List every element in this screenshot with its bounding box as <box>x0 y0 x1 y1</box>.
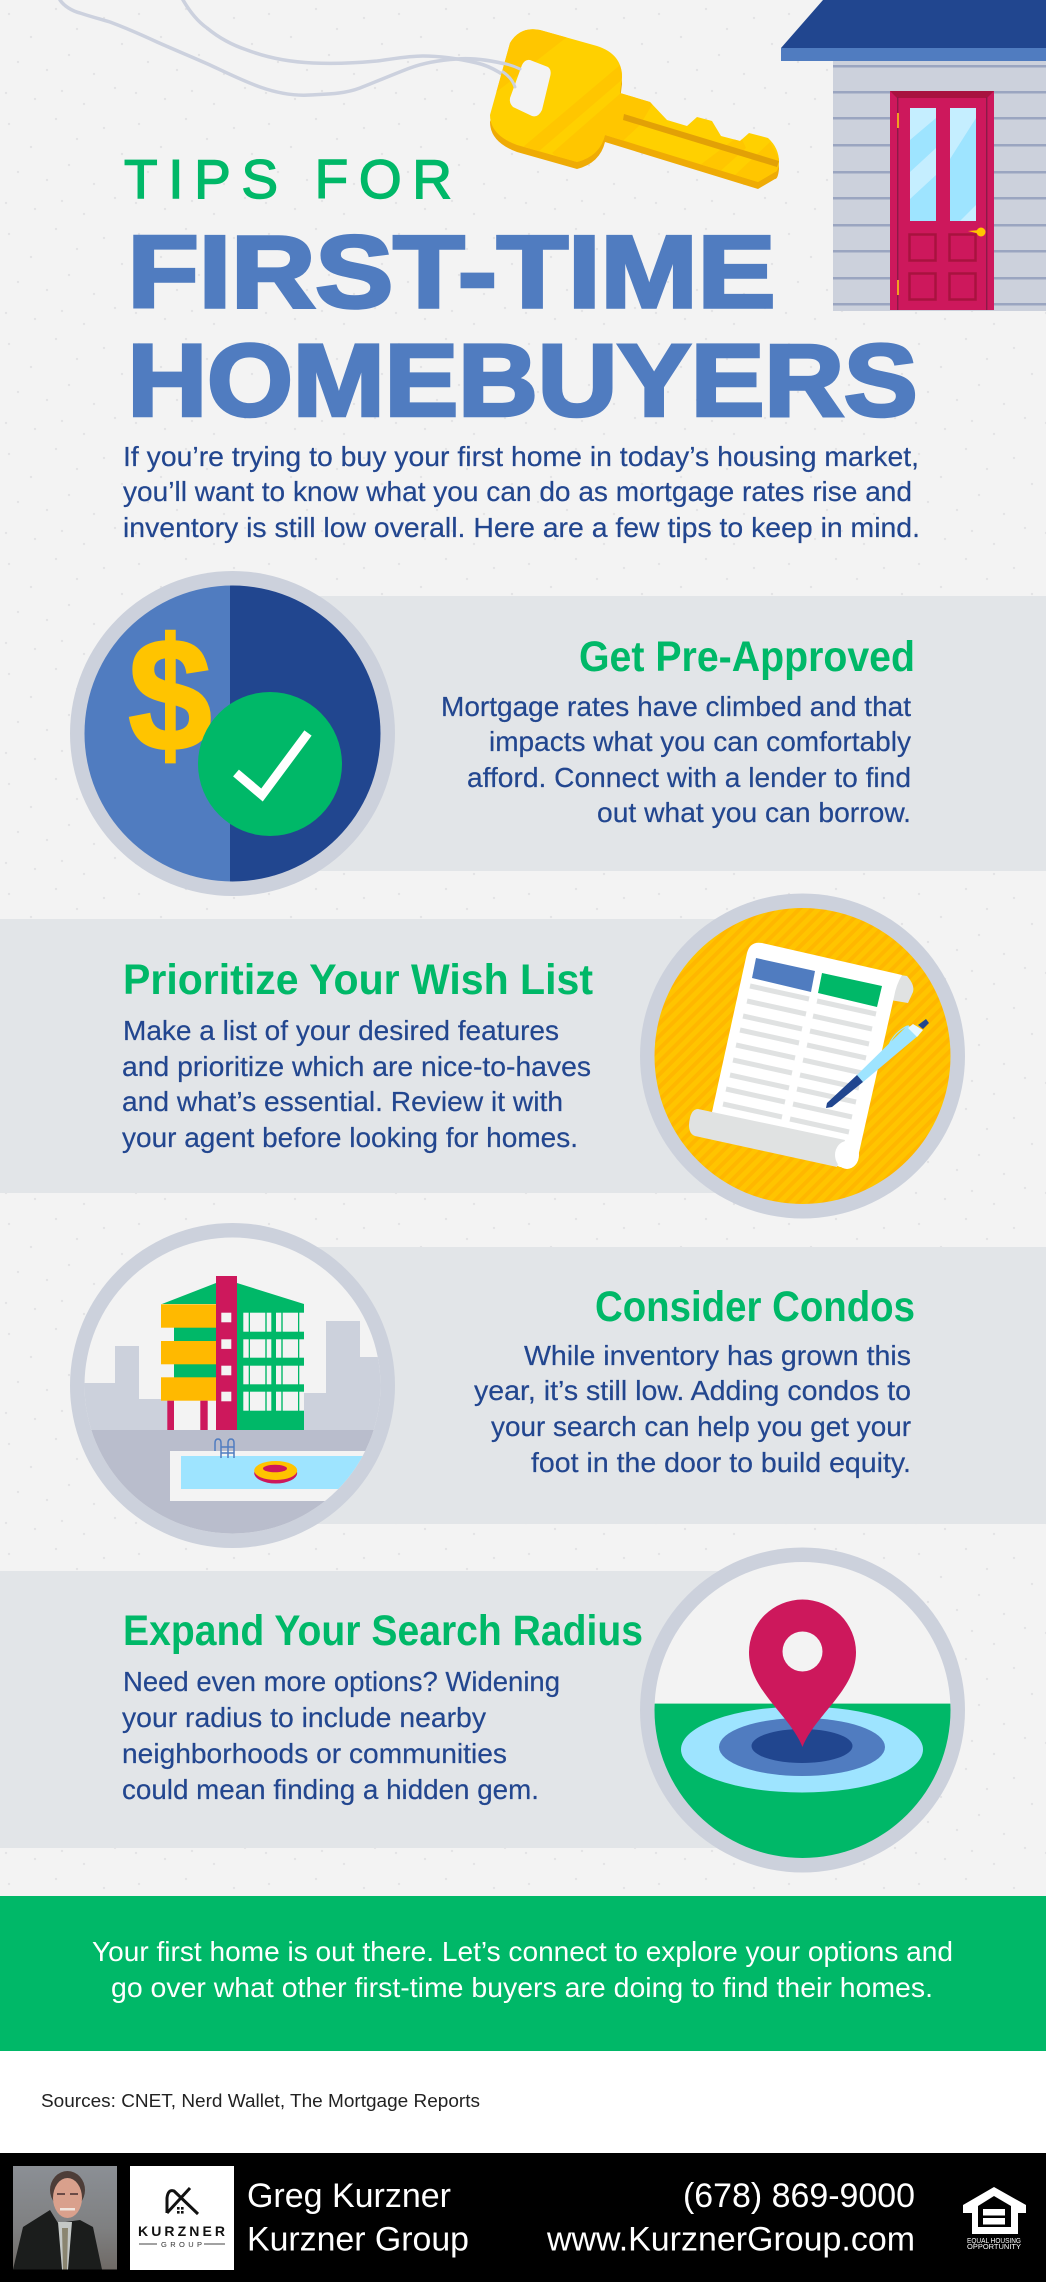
title: get pre-approved: Get Pre-Approved <box>579 633 915 681</box>
sources section: Sources: CNET, Nerd Wallet, The Mortgage Reports <box>41 2091 480 2111</box>
contact details: www.KurznerGroup.com <box>546 2220 915 2258</box>
body: consider condos: foot in the door to build equity. <box>531 1447 911 1478</box>
body: prioritize your wish list: your agent before looking for homes. <box>122 1122 578 1153</box>
icon: condo building with pool <box>70 1223 395 1548</box>
body: consider condos: year, it’s still low. Adding condos to <box>474 1375 911 1406</box>
body: get pre-approved: out what you can borrow. <box>597 797 911 828</box>
body: expand your search radius <box>122 1666 560 1805</box>
icon: dollar and checkmark: $ <box>128 605 212 784</box>
intro text <box>123 441 920 543</box>
body: expand your search radius: your radius to include nearby <box>122 1702 486 1733</box>
body: get pre-approved <box>441 691 911 828</box>
footer contact bar <box>0 2153 1046 2282</box>
title: expand your search radius: Expand Your Search Radius <box>123 1607 643 1655</box>
heading: First-Time Homebuyers: FIRST-TIME <box>128 215 776 329</box>
panel: get pre-approved <box>70 571 1046 896</box>
body: consider condos: your search can help you get your <box>491 1411 911 1442</box>
icon: key strings <box>60 0 520 95</box>
title: consider condos: Consider Condos <box>595 1283 915 1331</box>
company logo <box>130 2166 234 2270</box>
sources section <box>0 2051 1046 2153</box>
company logo: GROUP <box>161 2240 202 2249</box>
body: prioritize your wish list <box>122 1015 591 1153</box>
body: get pre-approved: impacts what you can comfortably <box>489 726 911 757</box>
title: prioritize your wish list: Prioritize Your Wish List <box>123 956 593 1004</box>
panel: consider condos <box>70 1223 1046 1548</box>
body: expand your search radius: could mean finding a hidden gem. <box>122 1774 539 1805</box>
icon: dollar and checkmark <box>70 571 395 896</box>
body: prioritize your wish list: and what’s essential. Review it with <box>122 1086 563 1117</box>
icon: document and pen <box>640 894 965 1218</box>
intro text: you’ll want to know what you can do as mortgage rates rise and <box>123 476 912 507</box>
intro text: If you’re trying to buy your first home in today’s housing market, <box>123 441 919 472</box>
body: get pre-approved: Mortgage rates have climbed and that <box>441 691 911 722</box>
heading: First-Time Homebuyers: HOMEBUYERS <box>128 324 917 438</box>
agent photo <box>13 2166 117 2270</box>
heading: First-Time Homebuyers <box>128 215 917 438</box>
panel: prioritize your wish list <box>0 894 965 1218</box>
agent name <box>247 2177 469 2258</box>
contact details: (678) 869-9000 <box>683 2177 915 2215</box>
heading: Tips for: TIPS FOR <box>124 148 452 210</box>
call to action banner: go over what other first-time buyers are doing to find their homes. <box>111 1972 933 2003</box>
agent name: Greg Kurzner <box>247 2177 451 2215</box>
icon: equal housing opportunity: EQUAL HOUSING <box>967 2238 1021 2245</box>
icon: map pin <box>640 1548 965 1872</box>
intro text: inventory is still low overall. Here are a few tips to keep in mind. <box>123 512 920 543</box>
body: expand your search radius: Need even more options? Widening <box>123 1666 560 1697</box>
body: prioritize your wish list: and prioritize which are nice-to-haves <box>122 1051 591 1082</box>
panel: expand your search radius <box>0 1548 965 1872</box>
contact details <box>546 2177 915 2258</box>
body: expand your search radius: neighborhoods or communities <box>122 1738 507 1769</box>
body: get pre-approved: afford. Connect with a lender to find <box>467 762 911 793</box>
body: prioritize your wish list: Make a list of your desired features <box>123 1015 559 1046</box>
icon: equal housing opportunity: OPPORTUNITY <box>967 2244 1021 2251</box>
body: consider condos <box>474 1340 911 1478</box>
icon: key <box>490 29 779 189</box>
icon: house with red door <box>781 0 1046 311</box>
body: consider condos: While inventory has grown this <box>524 1340 911 1371</box>
icon: equal housing opportunity <box>963 2187 1026 2251</box>
company logo: KURZNER <box>138 2223 225 2239</box>
call to action banner <box>0 1896 1046 2051</box>
agent name: Kurzner Group <box>247 2220 469 2258</box>
call to action banner: Your first home is out there. Let’s connect to explore your options and <box>92 1936 953 1967</box>
